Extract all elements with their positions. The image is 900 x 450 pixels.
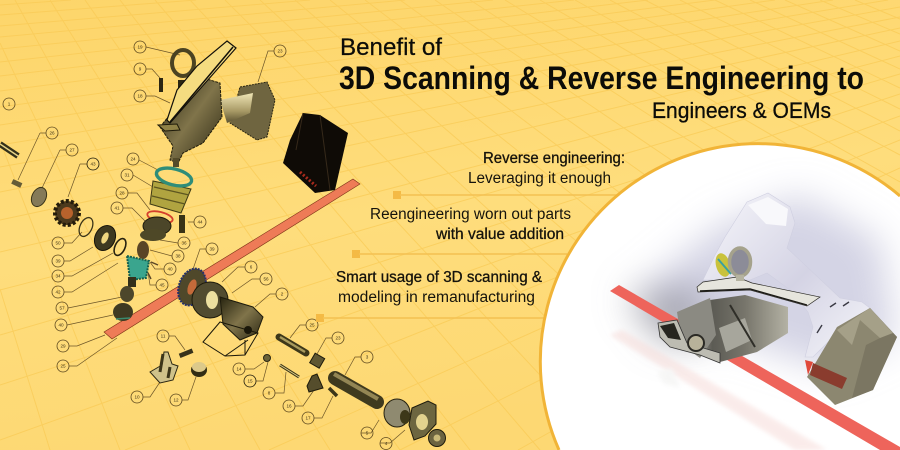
exploded view: part number callouts: 19 (137, 45, 143, 50)
divider: first benefit (393, 191, 620, 199)
exploded view: left edge part (0, 144, 18, 156)
benefit text: smart usage of 3D scanning: Smart usage of 3D scanning & (336, 269, 543, 286)
exploded view: part number callouts: 57 (59, 306, 65, 311)
exploded view: part number callouts: 17 (305, 416, 311, 421)
exploded view: part number callouts: 34 (55, 274, 61, 279)
motor body (658, 295, 788, 363)
exploded view: part number callouts: 6 (250, 265, 253, 270)
exploded view: part number callouts: 50 (55, 241, 61, 246)
title: Benefit of (340, 34, 442, 61)
black battery part (283, 113, 348, 193)
exploded view: part number callouts: 5 (366, 431, 369, 436)
exploded view: part number callouts: 45 (159, 283, 165, 288)
soft shadow behind the drill (625, 195, 895, 370)
title: Engineers & OEMs (652, 98, 831, 123)
exploded view: part number callouts: 27 (69, 148, 75, 153)
exploded view: part number callouts: 26 (49, 131, 55, 136)
exploded view: part number callouts: 23 (277, 49, 283, 54)
exploded view: part number callouts: 18 (137, 94, 143, 99)
exploded view: part number callouts: 25 (60, 364, 66, 369)
exploded view: part number callouts: 1 (8, 102, 11, 107)
lifting ring (730, 248, 750, 281)
exploded view: part number callouts: 10 (134, 395, 140, 400)
exploded view: small parts column (11, 165, 193, 321)
benefit text: reengineering worn out parts (370, 206, 571, 243)
battery block (805, 308, 897, 405)
drill housing (703, 193, 870, 357)
floor reflection (610, 330, 827, 450)
benefit text: smart usage of 3D scanning (336, 269, 543, 306)
title (339, 34, 864, 123)
exploded view: part number callouts (3, 41, 392, 450)
exploded view: part number callouts: 12 (173, 398, 179, 403)
exploded view: part number callouts: 9 (139, 67, 142, 72)
benefit text: reengineering worn out parts: with value addition (435, 226, 564, 243)
exploded view: part number callouts: 11 (161, 334, 166, 339)
exploded view: part number callouts: 29 (60, 344, 66, 349)
exploded view: part number callouts: 43 (90, 162, 96, 167)
exploded view: part number callouts: 23 (335, 336, 341, 341)
divider: third benefit (316, 314, 547, 322)
exploded view: callout leader lines (18, 47, 405, 443)
benefit text: reverse engineering (468, 150, 625, 187)
benefit text: reverse engineering: Leveraging it enough (468, 170, 611, 187)
exploded view: part number callouts: 56 (263, 277, 269, 282)
exploded view: part number callouts: 2 (281, 292, 284, 297)
red strip on floor (610, 285, 900, 450)
benefit text: smart usage of 3D scanning: modeling in remanufacturing (338, 289, 535, 306)
divider: second benefit (352, 250, 567, 258)
exploded view: part number callouts: 41 (114, 206, 120, 211)
exploded view: upper drill assembly (158, 41, 275, 167)
exploded view: part number callouts: 15 (247, 379, 253, 384)
exploded view: part number callouts: 8 (268, 391, 271, 396)
exploded view: part number callouts: 40 (58, 323, 64, 328)
exploded view: part number callouts: 4 (385, 441, 388, 446)
end cap (688, 335, 704, 351)
exploded view: part number callouts: 38 (175, 254, 181, 259)
exploded view: part number callouts: 31 (124, 173, 130, 178)
exploded view: part number callouts: 39 (55, 259, 61, 264)
benefit text: reverse engineering: Reverse engineering: (483, 150, 625, 167)
exploded view: part number callouts: 44 (197, 220, 203, 225)
exploded view: part number callouts: 24 (130, 157, 136, 162)
exploded view: part number callouts: 40 (167, 267, 173, 272)
exploded view: part number callouts: 3 (366, 355, 369, 360)
benefit text: reengineering worn out parts: Reengineering worn out parts (370, 206, 571, 223)
exploded view: part number callouts: 16 (286, 404, 292, 409)
circular panel: rendered drill (540, 144, 900, 450)
exploded view: part number callouts: 14 (236, 367, 242, 372)
exploded view: lower small parts (150, 337, 446, 446)
exploded view: part number callouts: 39 (209, 247, 215, 252)
exploded view: part number callouts: 28 (119, 191, 125, 196)
red strip (104, 179, 360, 339)
exploded view: part number callouts: 36 (181, 241, 187, 246)
exploded view: part number callouts: 42 (55, 290, 61, 295)
lifting lever (697, 277, 820, 306)
exploded view: part number callouts: 25 (309, 323, 315, 328)
exploded view: central motor assembly (173, 265, 263, 356)
